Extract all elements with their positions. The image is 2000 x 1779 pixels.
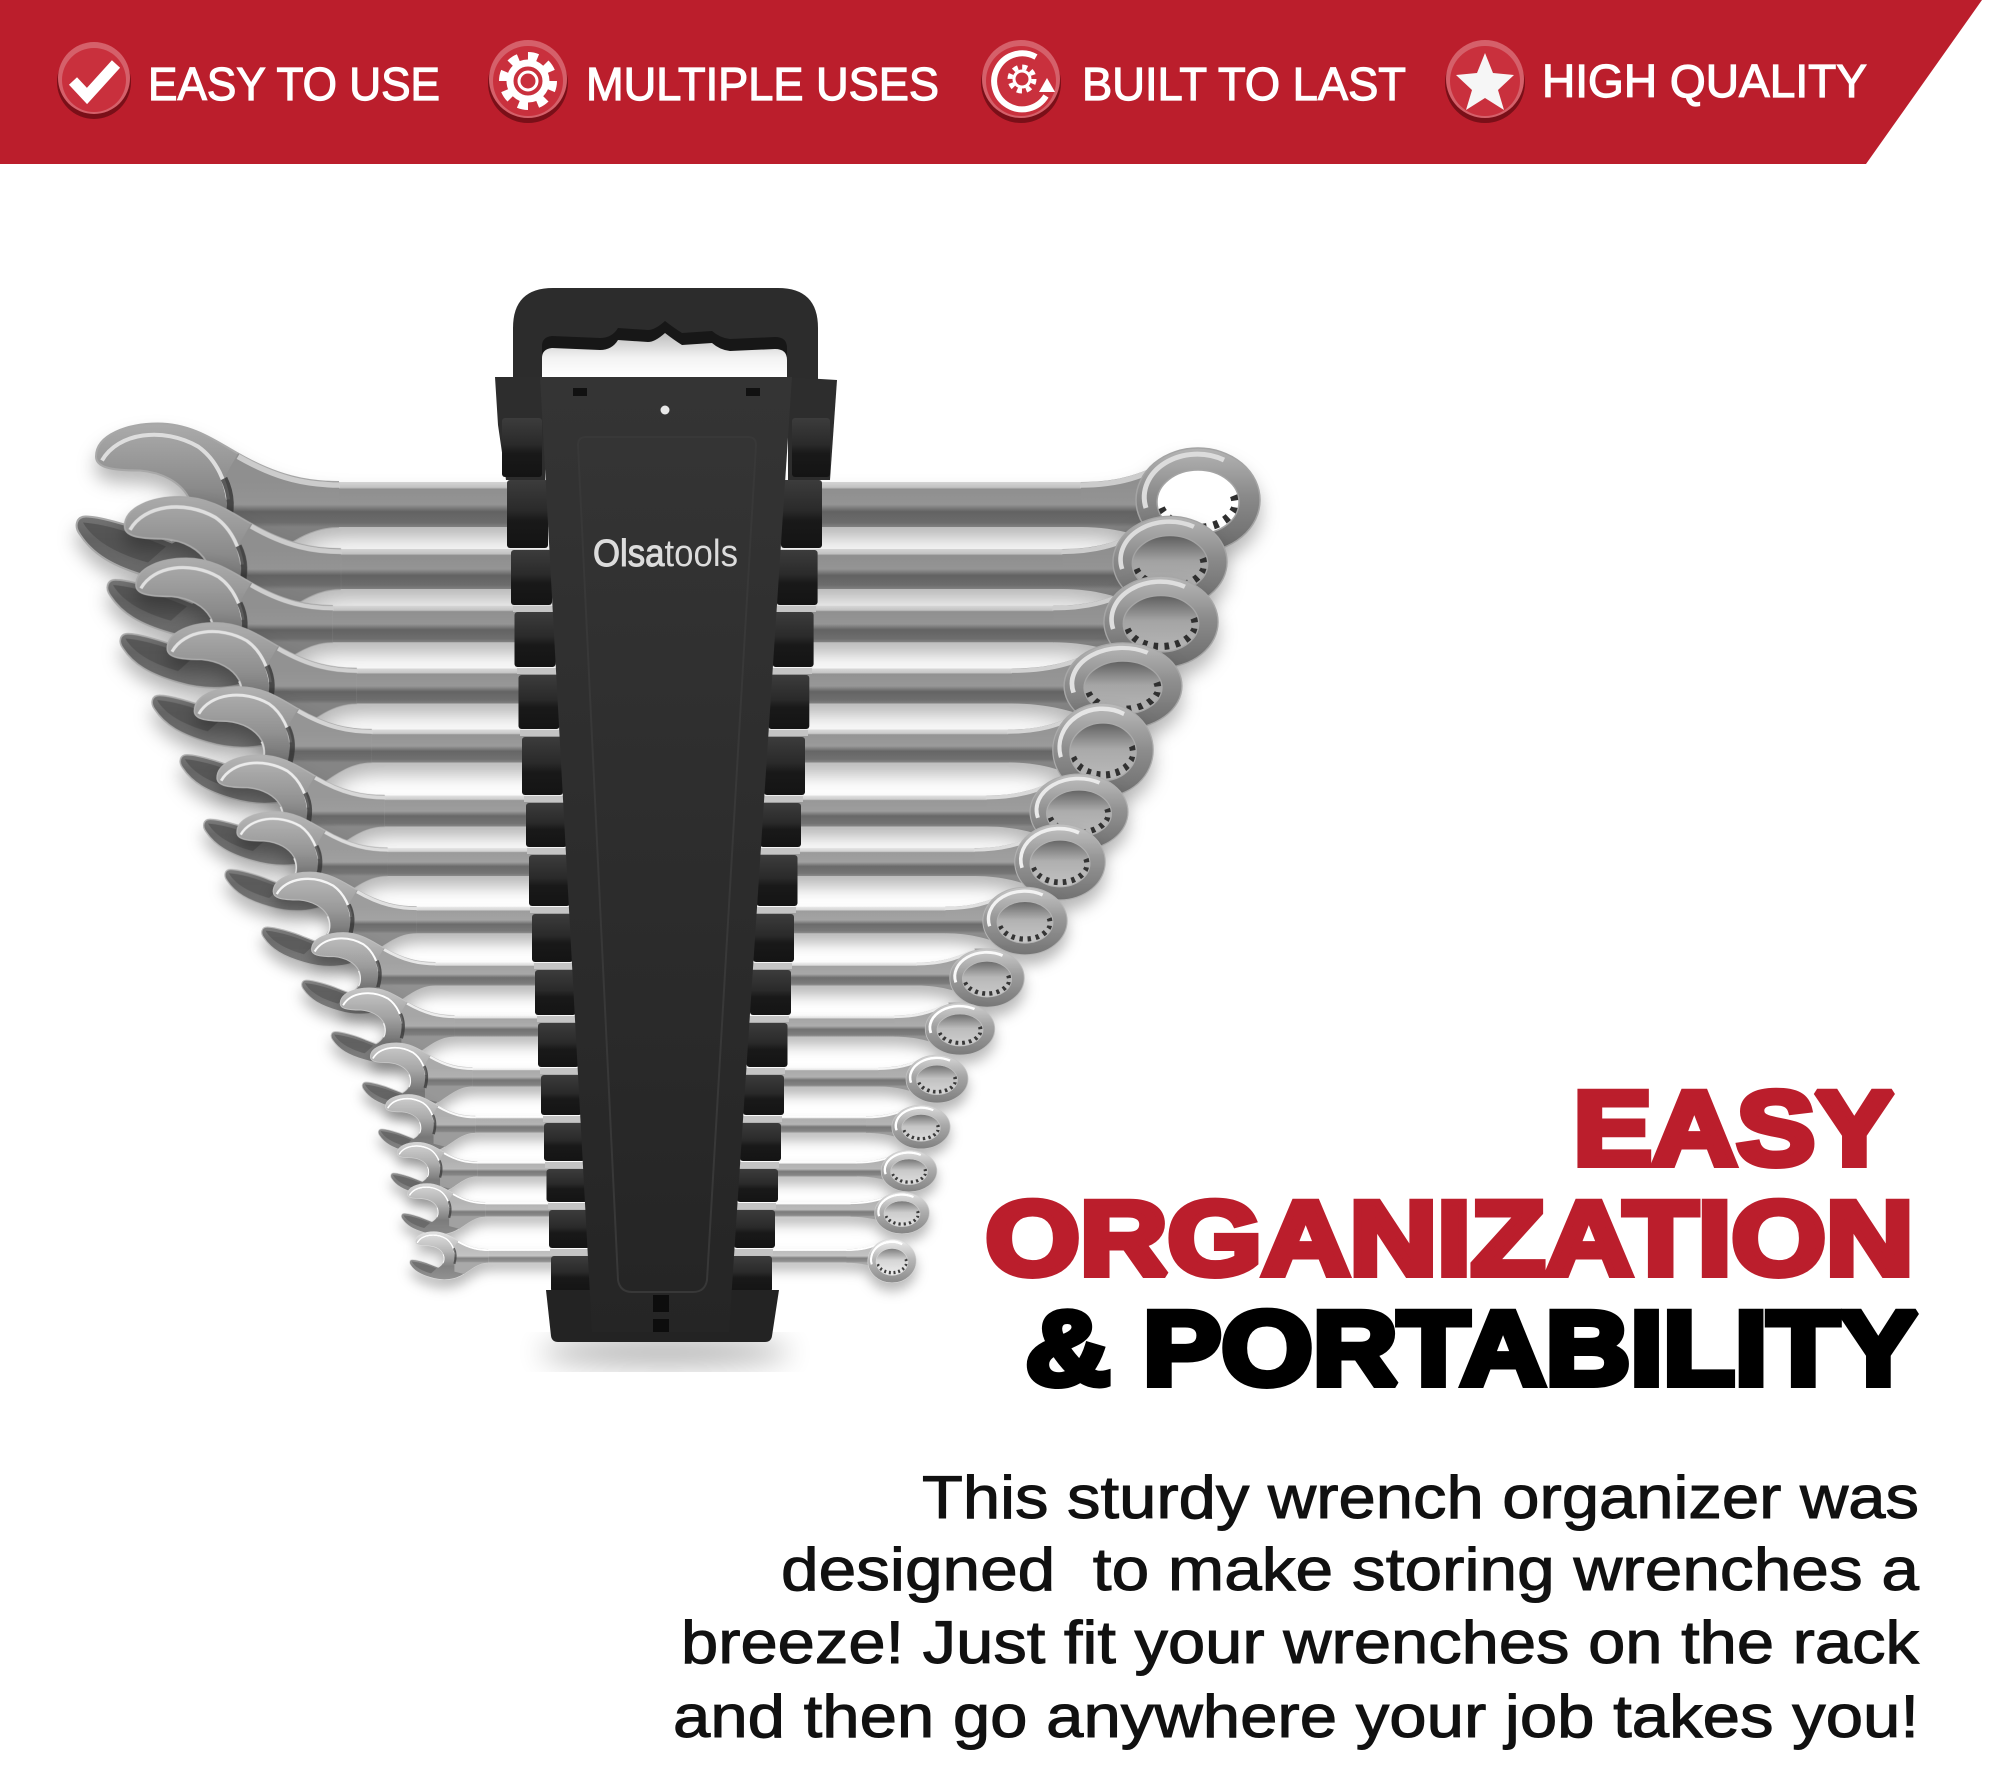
- rack mounting holes: [573, 388, 760, 1332]
- body line 3: breeze! Just fit your wrenches on the rack: [681, 1609, 1920, 1676]
- rack base: [546, 1290, 779, 1342]
- wrench 1: [77, 424, 1260, 583]
- wrench 14: [401, 1184, 929, 1235]
- wrench 8: [262, 872, 1067, 966]
- heading line: portability: & PORTABILITY: [1026, 1290, 1918, 1408]
- right clips: [731, 418, 830, 1292]
- body line 1: This sturdy wrench organizer was: [922, 1464, 1919, 1531]
- label: multiple uses: MULTIPLE USES: [586, 58, 939, 110]
- wrench 13: [391, 1142, 937, 1195]
- label: high quality: HIGH QUALITY: [1542, 55, 1867, 107]
- icon: cycle gear badge: [981, 40, 1061, 123]
- wrench 11: [362, 1043, 968, 1110]
- heading: [986, 1070, 1918, 1408]
- rack shadow: [540, 1338, 790, 1366]
- icon: star badge: [1445, 40, 1525, 123]
- rack logo: Olsatools: [593, 533, 738, 575]
- banner ribbon: [0, 0, 1982, 164]
- wrench 15: [410, 1232, 916, 1283]
- raised label panel: [578, 437, 756, 1292]
- icon: gear badge: [488, 40, 568, 123]
- label: easy to use: EASY TO USE: [148, 58, 440, 110]
- body line 4: and then go anywhere your job takes you!: [673, 1683, 1919, 1750]
- body line 2: designed to make storing wrenches a: [781, 1536, 1920, 1603]
- rack main panel: [540, 377, 792, 1332]
- wrench 2: [107, 497, 1227, 639]
- wrench 10: [331, 988, 995, 1063]
- wrench 5: [180, 687, 1153, 803]
- heading line: easy: EASY: [1574, 1070, 1894, 1188]
- wrench 7: [225, 812, 1105, 911]
- left clips: [502, 418, 592, 1292]
- wrench 12: [378, 1095, 950, 1154]
- wrench 4: [152, 623, 1182, 747]
- wrench 9: [302, 933, 1024, 1014]
- wrench set on rack: [77, 288, 1260, 1366]
- rack shoulders: [495, 377, 837, 480]
- label: built to last: BUILT TO LAST: [1082, 58, 1406, 110]
- header banner: [0, 0, 1982, 164]
- body copy: [673, 1464, 1920, 1750]
- heading line: organization: ORGANIZATION: [986, 1180, 1914, 1298]
- shaft highlights crossing the clips: [513, 606, 816, 1255]
- wrench 3: [120, 558, 1218, 688]
- rack handle: [513, 288, 818, 400]
- wrench 6: [204, 755, 1128, 865]
- icon: check badge: [57, 42, 131, 119]
